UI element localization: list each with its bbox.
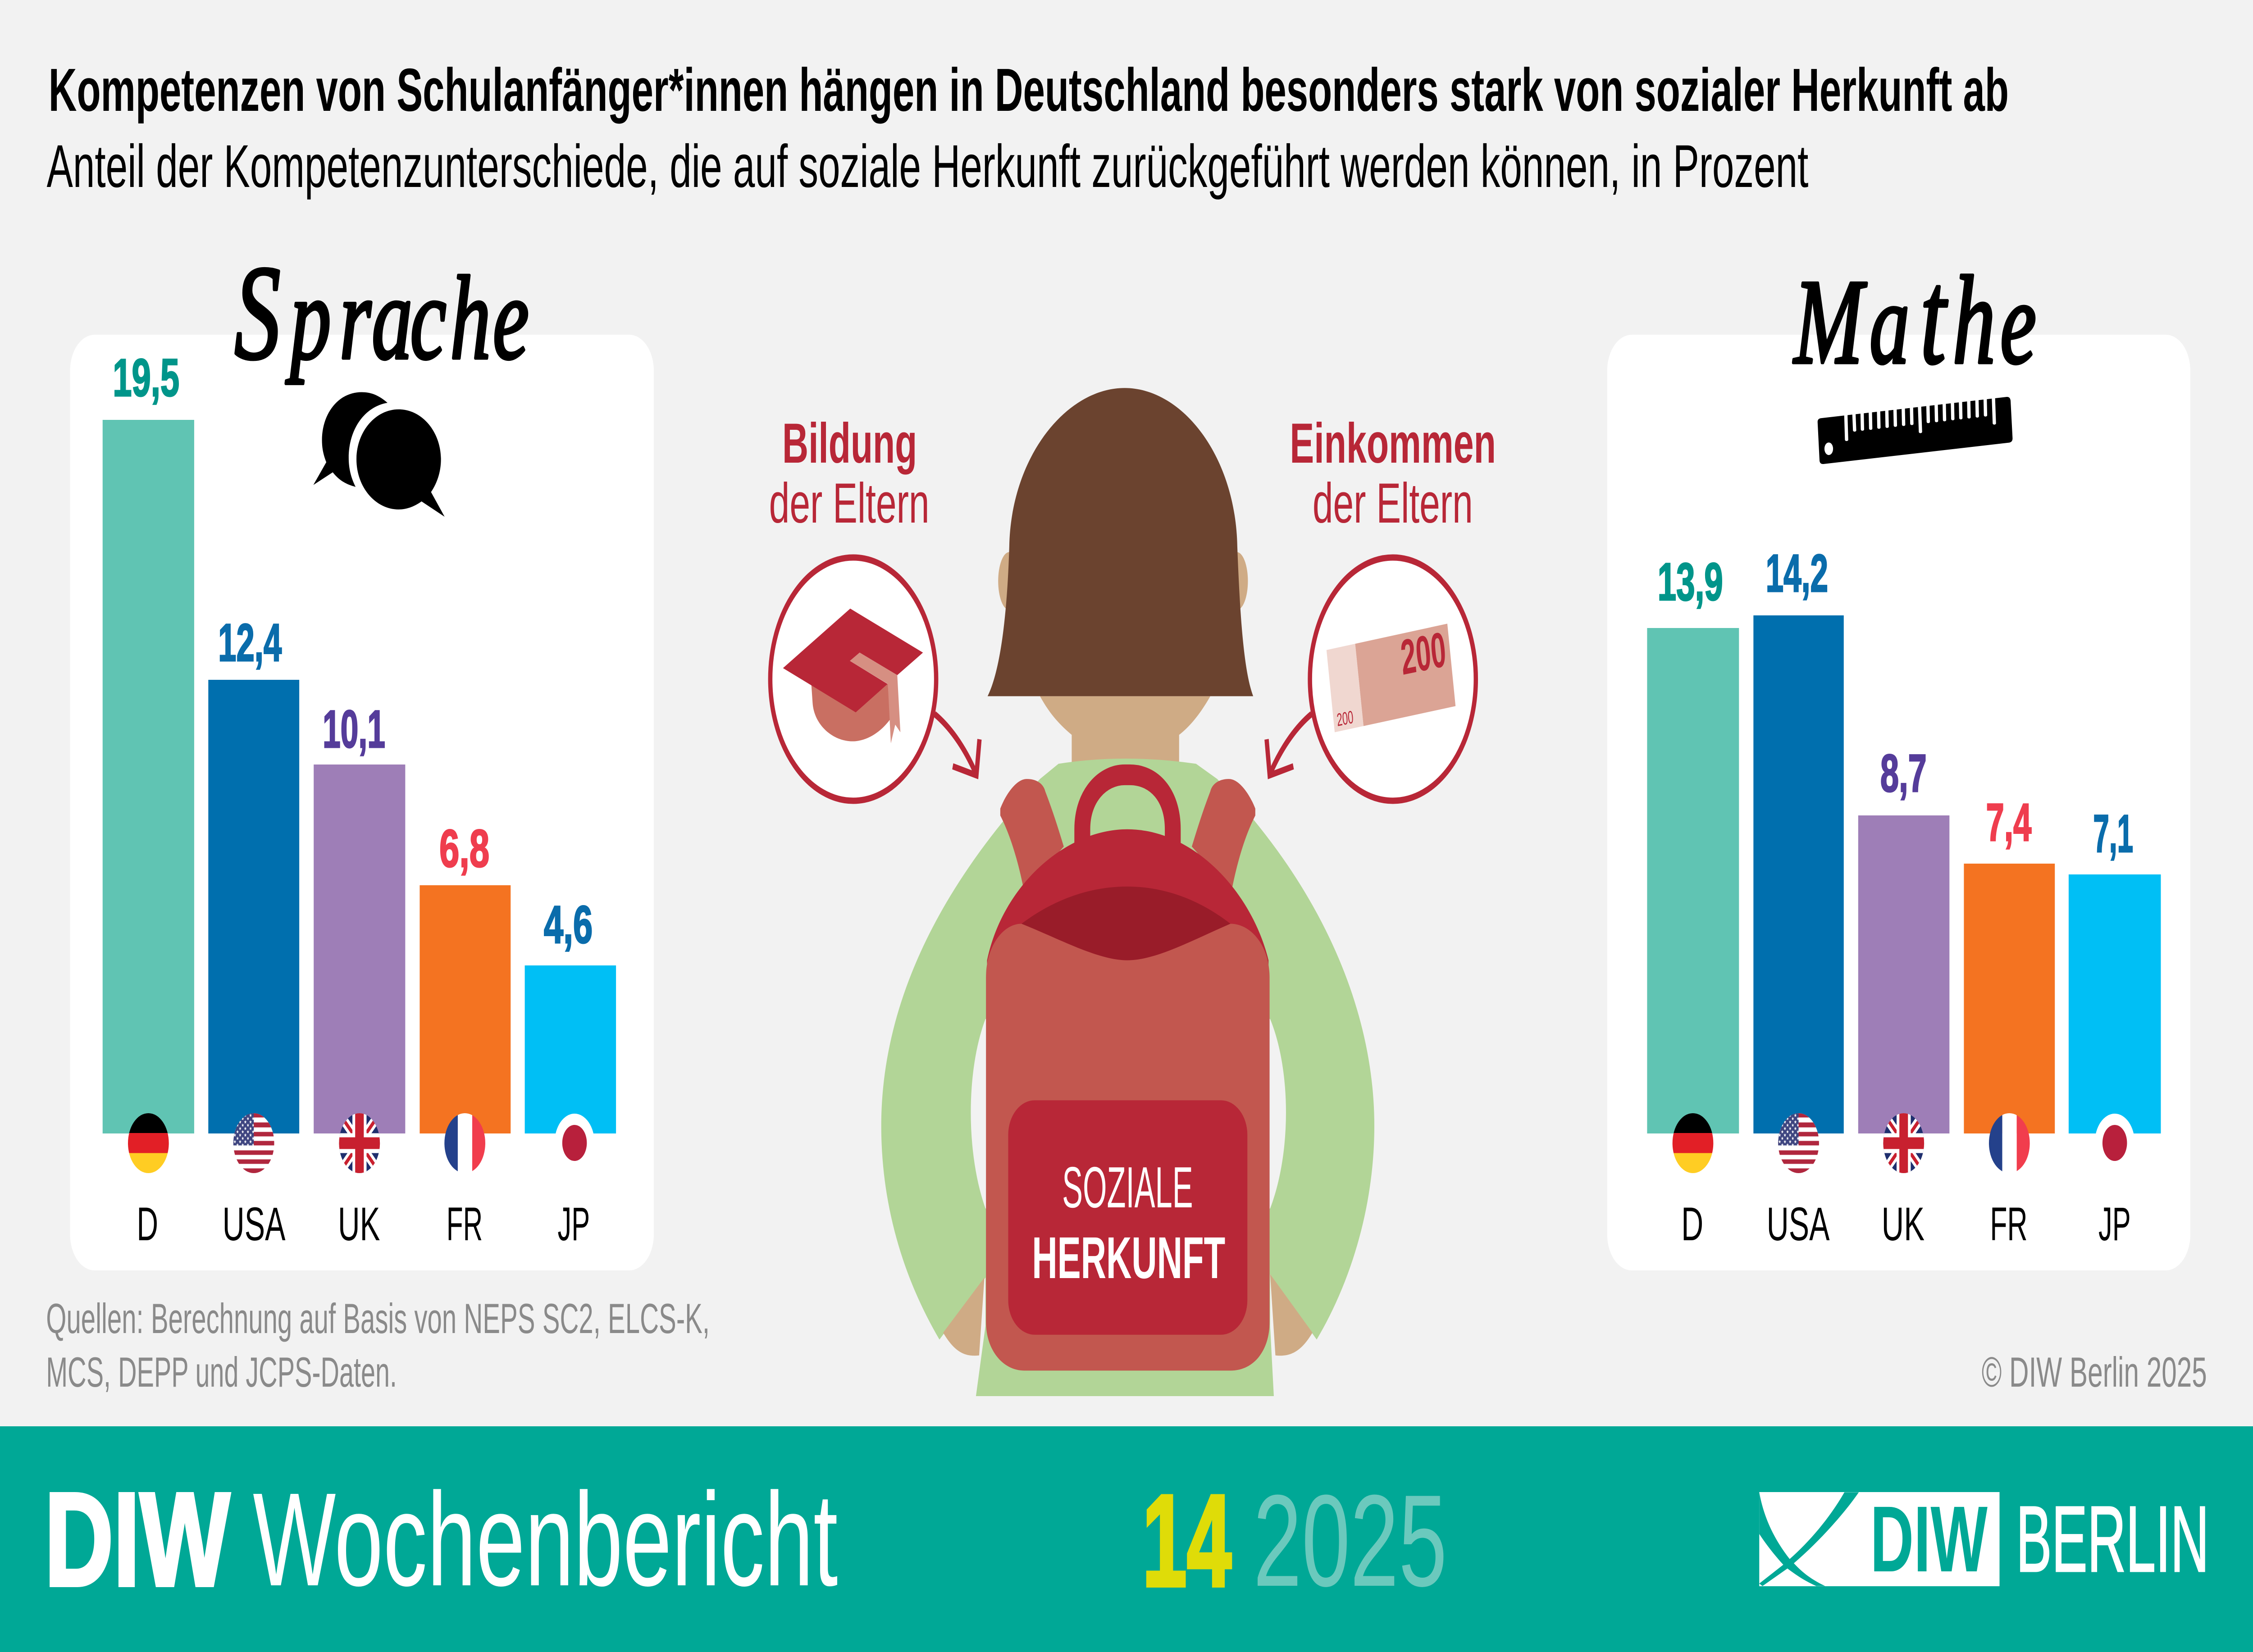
- hair: [988, 388, 1253, 696]
- handwritten heading: Mathe: h: [1952, 250, 1996, 390]
- source note: MCS, DEPP und JCPS-Daten.: [46, 1349, 397, 1396]
- handwritten heading: Sprache: p: [285, 252, 331, 384]
- handwritten heading: Sprache: c: [410, 252, 446, 384]
- source note: [46, 1295, 710, 1396]
- handwritten heading: Sprache: S: [234, 237, 281, 387]
- value USA: 14,2: [1766, 544, 1828, 603]
- left hand: [943, 1278, 985, 1356]
- bar FR 6,8: [420, 885, 511, 1133]
- bar UK 10,1: [314, 765, 405, 1133]
- label UK: UK: [1882, 1198, 1925, 1251]
- flag FR: [1989, 1113, 2030, 1173]
- logo: DIW Berlin: DIW: [1870, 1487, 1988, 1591]
- value FR: 6,8: [439, 819, 489, 878]
- flag JP: [2095, 1114, 2134, 1172]
- label JP: JP: [558, 1198, 590, 1251]
- handwritten heading: Sprache: h: [450, 252, 491, 384]
- panel: Mathe: [1607, 242, 2190, 1270]
- publication subtitle: Wochenbericht: [253, 1465, 838, 1614]
- bar USA 12,4: [208, 680, 299, 1133]
- label FR: FR: [447, 1198, 483, 1251]
- handwritten heading: Sprache: e: [493, 252, 529, 384]
- title: Kompetenzen von Schulanfänger*innen hängen in Deutschland besonders stark von sozialer Herkunft ab: [49, 56, 2009, 124]
- backpack top: [987, 829, 1268, 981]
- publication name: DIW: [45, 1465, 230, 1614]
- icon: speech bubbles: [313, 392, 445, 517]
- shirt: [881, 759, 1374, 1396]
- icon: ruler: [1818, 396, 2012, 464]
- bar JP 4,6: [525, 965, 616, 1133]
- logo: DIW Berlin: [1759, 1487, 2209, 1591]
- bar JP 7,1: [2069, 874, 2161, 1133]
- pocket text: HERKUNFT: [1032, 1225, 1225, 1291]
- value USA: 12,4: [218, 614, 282, 673]
- left strap: [1000, 779, 1064, 892]
- value FR: 7,4: [1986, 793, 2031, 852]
- callout: Einkommen der Eltern: [1290, 412, 1496, 535]
- callout: Bildung der Eltern: der Eltern: [769, 472, 930, 535]
- illustration: child with backpack: [881, 388, 1374, 1396]
- backpack handle: [1082, 775, 1173, 846]
- bar FR 7,4: [1964, 864, 2055, 1133]
- backpack body: [986, 924, 1270, 1370]
- bar D 13,9: [1647, 628, 1739, 1133]
- bar chart: Sprache: [103, 349, 616, 1251]
- flag D: [128, 1113, 169, 1173]
- label USA: USA: [1767, 1198, 1829, 1251]
- value D: 19,5: [113, 349, 179, 408]
- flag FR: [444, 1113, 485, 1173]
- pocket text: SOZIALE: [1062, 1155, 1193, 1220]
- value UK: 10,1: [323, 700, 385, 759]
- label FR: FR: [1990, 1198, 2028, 1251]
- bar D 19,5: [103, 420, 194, 1133]
- ears: [998, 552, 1248, 610]
- arrow: Einkommen to backpack: [1267, 714, 1311, 775]
- issue year: 2025: [1253, 1467, 1447, 1614]
- value JP: 4,6: [544, 896, 593, 955]
- label D: D: [137, 1198, 158, 1251]
- callout: Einkommen der Eltern: der Eltern: [1313, 472, 1473, 535]
- flag UK: [339, 1113, 380, 1173]
- icon: banknote in circle: 200: [1398, 621, 1448, 685]
- subtitle: Anteil der Kompetenzunterschiede, die auf soziale Herkunft zurückgeführt werden können, in Prozent: [47, 133, 1808, 200]
- source note: Quellen: Berechnung auf Basis von NEPS SC2, ELCS-K,: [46, 1295, 710, 1343]
- handwritten heading: Mathe: e: [2000, 257, 2036, 389]
- backpack pocket: [1008, 1100, 1247, 1335]
- label USA: USA: [223, 1198, 285, 1251]
- logo: DIW Berlin: BERLIN: [2016, 1487, 2209, 1591]
- handwritten heading: Sprache: a: [372, 252, 412, 384]
- backpack opening: [1022, 887, 1231, 960]
- bar UK 8,7: [1858, 815, 1949, 1133]
- flag D: [1672, 1113, 1714, 1173]
- gap between arms and body: [971, 1019, 1286, 1209]
- footer band: [0, 1426, 2253, 1652]
- flag USA: [233, 1113, 274, 1173]
- right strap: [1192, 779, 1255, 892]
- value JP: 7,1: [2093, 805, 2133, 864]
- copyright: © DIW Berlin 2025: [1982, 1349, 2207, 1396]
- icon: banknote in circle: 200: [1336, 707, 1354, 730]
- callout: Einkommen der Eltern: Einkommen: [1290, 412, 1496, 475]
- icon: graduation cap in circle: [770, 558, 936, 801]
- value D: 13,9: [1658, 553, 1723, 612]
- handwritten heading: Sprache: r: [339, 252, 371, 384]
- flag JP: [555, 1114, 594, 1172]
- pocket text: [1032, 1155, 1225, 1291]
- card background: [1607, 335, 2190, 1270]
- panel: Sprache: [70, 237, 654, 1270]
- icon: banknote in circle: [1310, 558, 1476, 801]
- label D: D: [1681, 1198, 1703, 1251]
- neck: [1040, 696, 1210, 767]
- bar USA 14,2: [1753, 615, 1844, 1133]
- callout: Bildung der Eltern: [769, 412, 930, 535]
- handwritten heading: Mathe: t: [1920, 242, 1949, 392]
- handwritten heading: Mathe: M: [1793, 254, 1867, 389]
- flag USA: [1778, 1113, 1819, 1173]
- bar chart: Mathe: [1647, 544, 2161, 1251]
- arrow: Bildung to backpack: [935, 714, 980, 775]
- card background: [70, 335, 654, 1270]
- issue number: 14: [1142, 1467, 1231, 1614]
- flag UK: [1883, 1113, 1924, 1173]
- value UK: 8,7: [1880, 744, 1927, 803]
- callout: Bildung der Eltern: Bildung: [782, 412, 917, 475]
- handwritten heading: Mathe: a: [1870, 259, 1910, 388]
- label JP: JP: [2098, 1198, 2131, 1251]
- right hand: [1270, 1274, 1313, 1356]
- label UK: UK: [338, 1198, 380, 1251]
